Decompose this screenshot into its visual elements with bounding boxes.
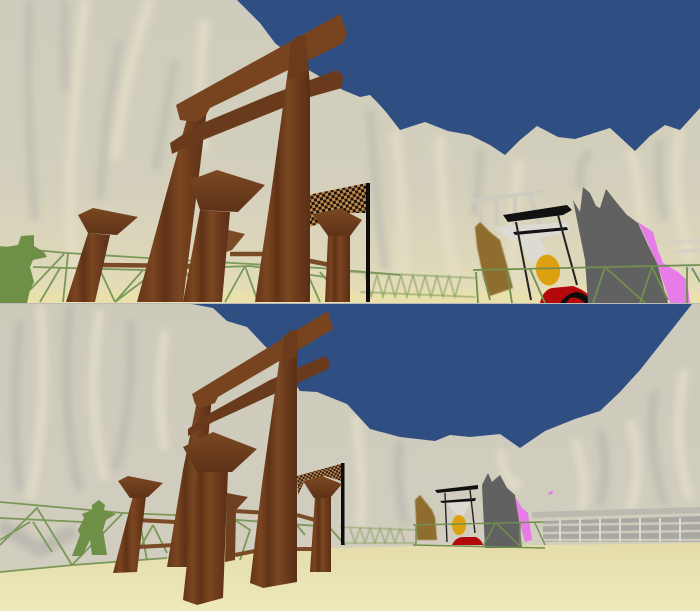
panel: top view bbox=[0, 0, 700, 303]
pale inner figure bbox=[495, 222, 570, 262]
torii gate: near bbox=[66, 14, 362, 302]
pink speck bbox=[548, 490, 553, 495]
cross rails bbox=[137, 511, 315, 555]
small capital bbox=[226, 230, 245, 252]
grey rock spire bbox=[482, 473, 522, 548]
near small fence bbox=[413, 522, 545, 548]
pale inner figure bbox=[447, 500, 472, 518]
panel: bottom view bbox=[0, 304, 700, 611]
torii gate: near bbox=[113, 311, 342, 605]
top beam bbox=[192, 311, 333, 408]
orange lantern bbox=[452, 515, 466, 535]
cliff streaks bbox=[0, 304, 690, 550]
green figure bbox=[72, 500, 116, 556]
right pillar bbox=[250, 335, 297, 588]
black gate bbox=[435, 485, 478, 542]
top beam bbox=[176, 14, 347, 122]
pink foliage bbox=[638, 222, 690, 303]
cross rails bbox=[100, 254, 330, 266]
sand ground bbox=[28, 294, 700, 302]
dried tree bbox=[475, 222, 513, 296]
red wheel bbox=[452, 537, 483, 545]
back pillar bbox=[137, 114, 206, 302]
sky bbox=[192, 304, 692, 448]
column: right bbox=[325, 235, 350, 302]
dried tree bbox=[415, 495, 437, 540]
near green fence, right bbox=[473, 265, 700, 303]
right pillar head bbox=[288, 36, 308, 80]
red wheel bbox=[540, 286, 588, 303]
pale structure on the right bbox=[668, 240, 700, 276]
cliff wall bbox=[0, 0, 700, 303]
orange lantern bbox=[536, 254, 560, 286]
flag pole bbox=[341, 463, 344, 545]
right pillar bbox=[255, 38, 310, 302]
column: far left bbox=[66, 233, 110, 302]
pale bleachers structure bbox=[532, 507, 700, 542]
cliff wall bbox=[0, 304, 700, 571]
distant fence bbox=[340, 527, 416, 543]
second beam bbox=[188, 356, 330, 436]
near green fence, left bbox=[0, 247, 400, 302]
black gate bbox=[503, 205, 577, 300]
flag pole bbox=[366, 183, 370, 302]
second beam bbox=[170, 70, 343, 154]
center column bbox=[183, 470, 228, 605]
checker flag bbox=[297, 463, 344, 495]
pink foliage bbox=[515, 497, 532, 542]
small rear column bbox=[225, 493, 248, 562]
green figure bbox=[0, 235, 47, 303]
right pillar head bbox=[282, 330, 298, 364]
distant fence bbox=[348, 272, 475, 297]
back pillar bbox=[167, 396, 212, 567]
cliff streaks bbox=[28, 0, 690, 300]
checker flag bbox=[308, 183, 367, 227]
distant pale gate bbox=[415, 476, 460, 500]
sand ground bbox=[0, 543, 700, 611]
center column bbox=[183, 210, 230, 302]
column left bbox=[113, 496, 146, 573]
gate silhouette, pale, distant bbox=[472, 192, 541, 225]
column right bbox=[310, 497, 331, 572]
sky bbox=[237, 0, 700, 155]
grey rock spire bbox=[573, 187, 668, 303]
near green fence, left bbox=[0, 502, 345, 572]
